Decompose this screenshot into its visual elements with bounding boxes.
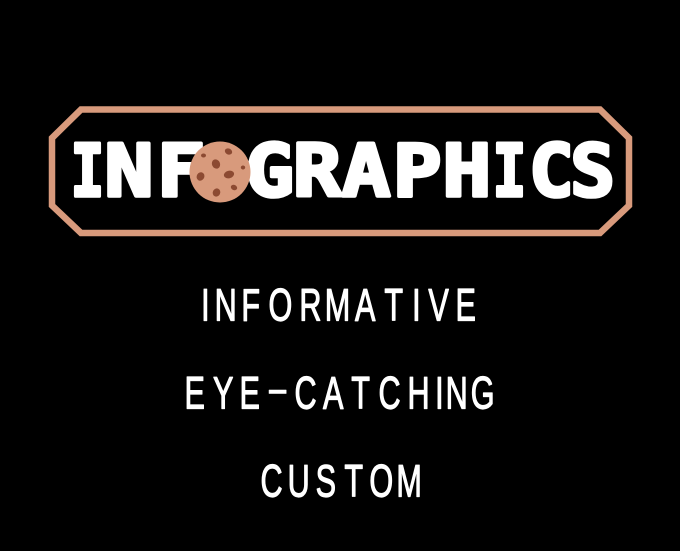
- text: INFORMATIVE: INFORMATIVE: [201, 281, 476, 331]
- title: INFOGRAPHICS: [71, 130, 615, 214]
- icon: cookie replacing the letter O: [190, 142, 250, 202]
- text: EYE-CATCHING: [184, 364, 495, 419]
- list of qualities: [184, 281, 495, 507]
- title: INFOGRAPHICS: GRAPH: [245, 130, 491, 214]
- text: EYE-CATCHING: EYE: [184, 369, 260, 419]
- title: INFOGRAPHICS: I: [71, 130, 104, 214]
- text: EYE-CATCHING: CATCHING: [295, 369, 495, 419]
- text: EYE-CATCHING: -: [266, 364, 289, 414]
- title: INFOGRAPHICS: NF: [104, 130, 206, 214]
- title: INFOGRAPHICS: CS: [529, 130, 615, 214]
- text: CUSTOM: CUSTOM: [261, 457, 422, 507]
- title: INFOGRAPHICS: I: [493, 130, 526, 214]
- logo badge: [52, 110, 629, 233]
- octagonal frame: [52, 110, 629, 233]
